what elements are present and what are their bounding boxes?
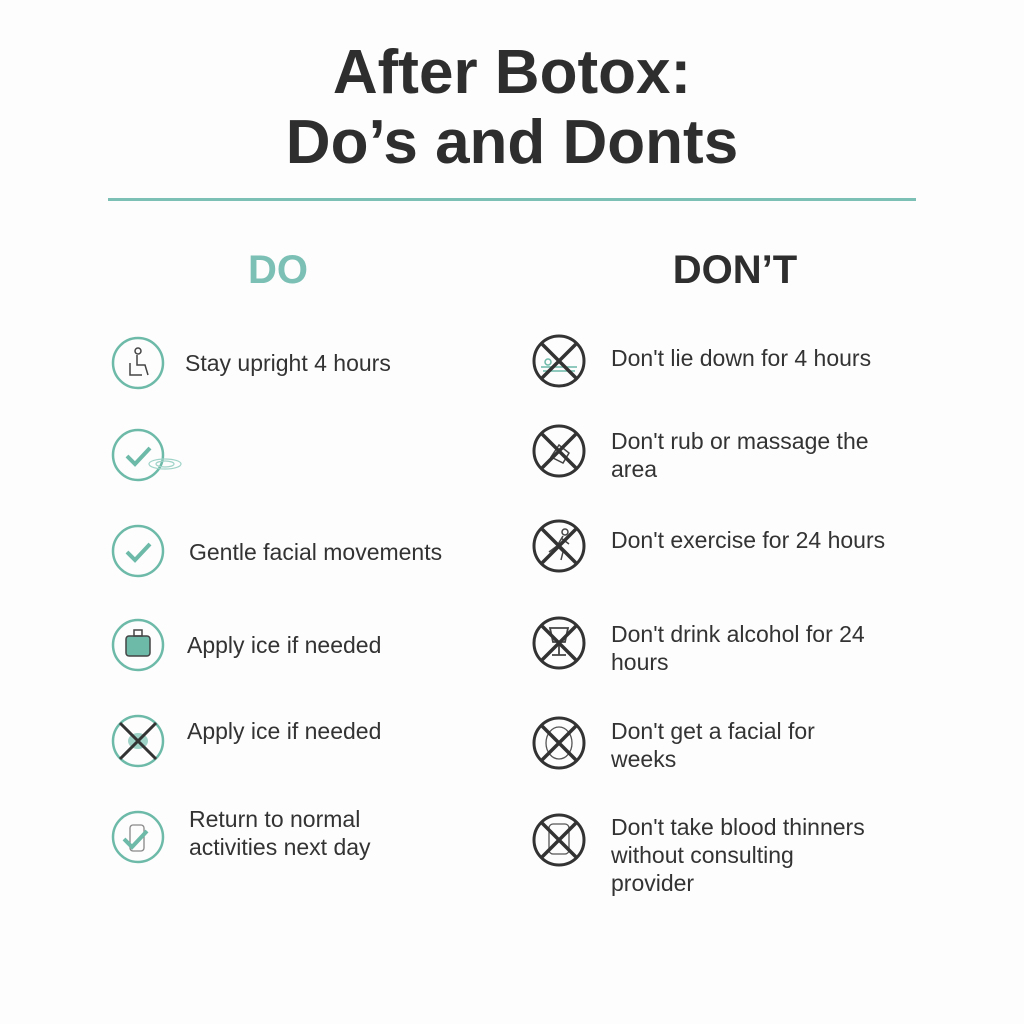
icon: crossed [112,714,164,768]
heading: DON'T: DON’T [673,248,797,292]
text [611,814,865,896]
icon: no exercise [532,520,586,572]
text: return to normal: activities next day [189,834,371,860]
text: gentle facial: Gentle facial movements [189,539,442,565]
text: weeks [611,746,676,772]
panel: do list [112,336,442,864]
text: Don't exercise for 24 hours [611,527,885,553]
panel: dont list [532,334,885,896]
text: Don't lie down for 4 hours [611,345,871,371]
icon: check [112,524,164,578]
text [611,621,865,675]
text: apply ice 2: Apply ice if needed [187,718,381,744]
text: area [611,456,657,482]
icon: no rubbing [532,424,586,478]
text: stay upright: Stay upright 4 hours [185,350,391,376]
text: Don't drink alcohol for 24 [611,621,865,647]
text: Don't get a facial for [611,718,815,744]
text [611,428,869,482]
title [286,38,738,177]
heading: DO: DO [248,248,308,292]
text: return to normal [189,806,371,860]
text: return to normal: Return to normal [189,806,360,832]
icon: no facial [532,716,586,770]
icon: bottle check [112,810,164,864]
title: After Botox: [333,38,691,107]
icon: ice pack [112,618,164,672]
text: Don't rub or massage the [611,428,869,454]
text: Don't take blood thinners [611,814,865,840]
title: Do’s and Donts [286,108,738,177]
icon: check with waves [112,428,182,482]
icon: no alcohol [532,616,586,670]
icon: no blood thinners [532,814,586,866]
icon: no lying [532,334,586,388]
text: provider [611,870,694,896]
icon: seated [112,336,164,390]
text [611,718,815,772]
text: apply ice: Apply ice if needed [187,632,381,658]
text: hours [611,649,669,675]
text: without consulting [611,842,794,868]
